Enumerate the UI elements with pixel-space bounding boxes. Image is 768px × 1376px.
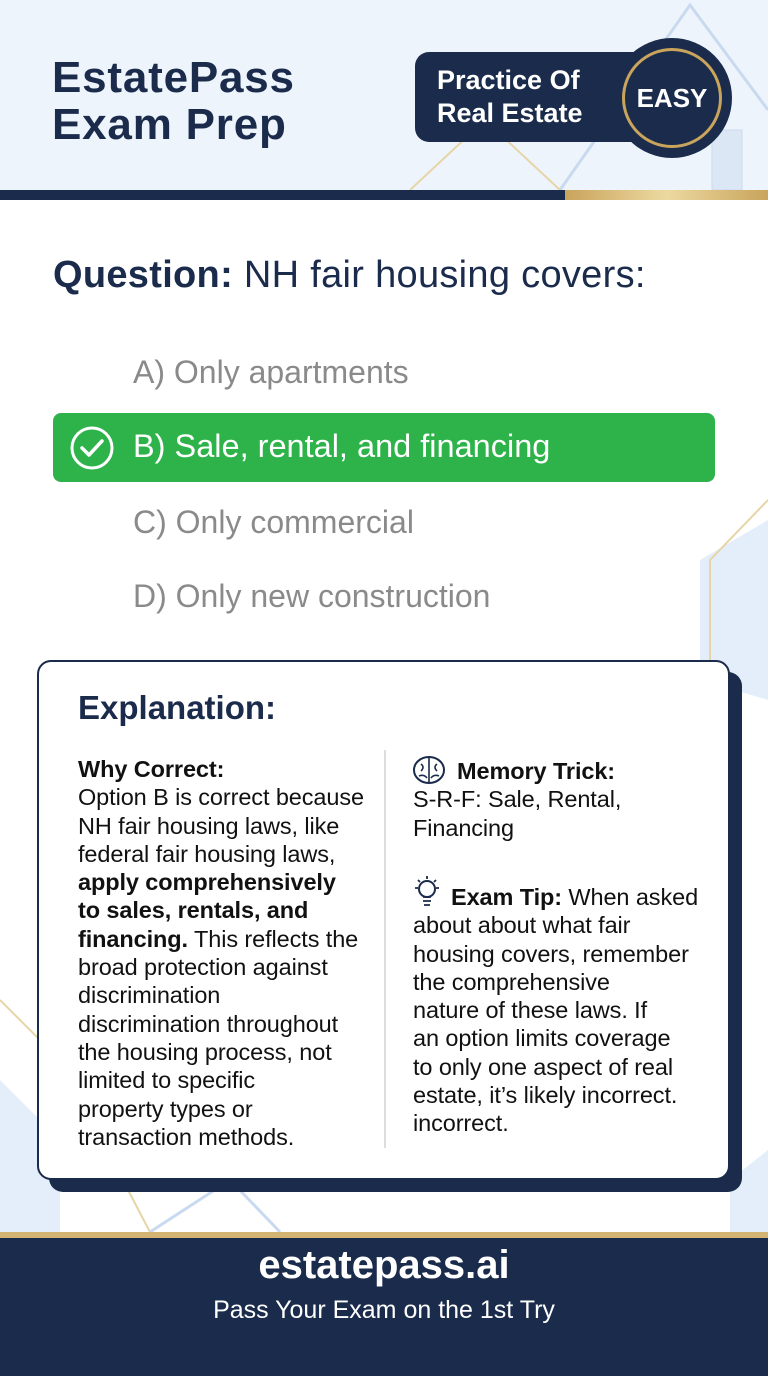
- exam tip: estate, it’s likely incorrect.: [413, 1082, 677, 1108]
- why correct: financing. This reflects the: [78, 926, 358, 952]
- option A: A) Only apartments: [133, 354, 409, 390]
- why correct: apply comprehensively: [78, 869, 336, 895]
- footer tagline: Pass Your Exam on the 1st Try: [213, 1296, 555, 1324]
- exam tip: to only one aspect of real: [413, 1054, 673, 1080]
- why correct: Option B is correct because: [78, 784, 364, 810]
- option C: C) Only commercial: [133, 504, 414, 540]
- why correct: broad protection against: [78, 954, 328, 980]
- option B correct: [53, 413, 715, 482]
- heading: Explanation:: [78, 689, 276, 726]
- why correct: property types or: [78, 1096, 253, 1122]
- footer site: estatepass.ai: [258, 1243, 510, 1287]
- icon: brain: [413, 756, 445, 784]
- why correct: discrimination: [78, 982, 220, 1008]
- title: [52, 53, 295, 149]
- title: EstatePass: [52, 53, 295, 102]
- memory trick: S-R-F: Sale, Rental,: [413, 786, 621, 812]
- footer: [0, 1232, 768, 1376]
- badge: [415, 38, 732, 158]
- why correct: to sales, rentals, and: [78, 897, 308, 923]
- why correct: federal fair housing laws,: [78, 841, 335, 867]
- header bar: [0, 190, 565, 200]
- option B correct: B) Sale, rental, and financing: [133, 428, 550, 464]
- why correct: Why Correct:: [78, 756, 224, 782]
- explanation panel: [37, 660, 742, 1192]
- memory trick: Financing: [413, 815, 514, 841]
- icon: lightbulb: [415, 876, 439, 906]
- memory trick: Memory Trick:: [457, 758, 615, 784]
- memory trick: [413, 758, 621, 841]
- exam tip: incorrect.: [413, 1110, 509, 1136]
- why correct: limited to specific: [78, 1067, 255, 1093]
- question: Question: NH fair housing covers:: [53, 254, 646, 296]
- exam tip: housing covers, remember: [413, 941, 689, 967]
- why correct: NH fair housing laws, like: [78, 813, 339, 839]
- exam tip: [413, 884, 698, 1136]
- exam tip: an option limits coverage: [413, 1025, 670, 1051]
- badge: EASY: [637, 83, 707, 113]
- why correct: [78, 756, 364, 1150]
- why correct: transaction methods.: [78, 1124, 294, 1150]
- option D: D) Only new construction: [133, 578, 490, 614]
- exam tip: about about what fair: [413, 912, 630, 938]
- title: Exam Prep: [52, 100, 287, 149]
- exam tip: the comprehensive: [413, 969, 610, 995]
- badge: Real Estate: [437, 98, 583, 128]
- why correct: the housing process, not: [78, 1039, 332, 1065]
- exam tip: Exam Tip: When asked: [451, 884, 698, 910]
- badge: Practice Of: [437, 65, 580, 95]
- exam tip: nature of these laws. If: [413, 997, 647, 1023]
- why correct: discrimination throughout: [78, 1011, 338, 1037]
